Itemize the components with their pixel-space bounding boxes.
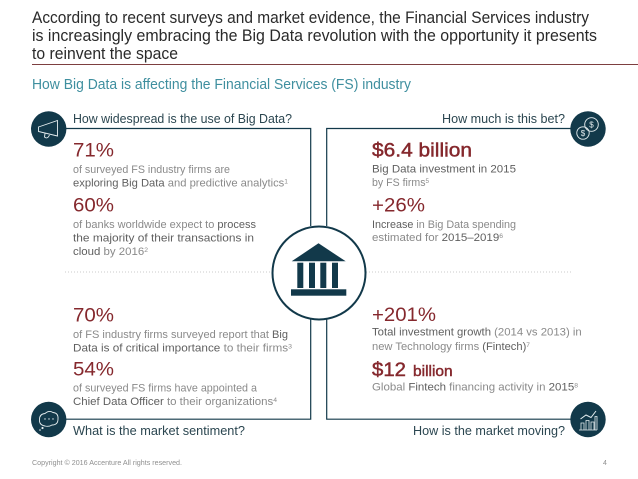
- panel: how widespread: How widespread is the use of Big Data?: [73, 111, 292, 126]
- stat: +26%: estimated for 2015–2019: [372, 232, 497, 244]
- panel: how much: [372, 111, 565, 244]
- stat: +26%: [372, 195, 516, 244]
- stat: 60%: [73, 195, 256, 258]
- stat: $12 billion: Global Fintech financing activity in 2015: [372, 382, 573, 394]
- title: to reinvent the space: [32, 44, 178, 63]
- stat: +26%: Increase in Big Data spending: [372, 219, 516, 231]
- quadrant frame: [66, 128, 572, 419]
- stat: $12 billion: $12: [372, 359, 406, 381]
- stat: $12 billion: 8: [574, 383, 578, 390]
- stat: 70%: 3: [288, 344, 292, 351]
- footer copyright: Copyright © 2016 Accenture All rights reserved.: [32, 459, 182, 467]
- stat: 60%: 60%: [73, 195, 114, 217]
- icon: coins: $: [589, 120, 594, 130]
- stat: 71%: 1: [284, 179, 288, 186]
- icon: thought cloud: [31, 402, 66, 437]
- stat: 60%: 2: [144, 247, 148, 254]
- stat: +26%: +26%: [372, 195, 425, 217]
- stat: $6.4 billion: Big Data investment in 2015: [372, 164, 516, 176]
- stat: +26%: 6: [499, 233, 503, 240]
- stat: 60%: of banks worldwide expect to process: [73, 219, 256, 231]
- stat: 71%: [73, 140, 288, 190]
- stat: 71%: of surveyed FS industry firms are: [73, 164, 230, 176]
- panel: market moving: How is the market moving?: [413, 423, 565, 438]
- icon: rising chart: [570, 402, 606, 437]
- stat: 60%: the majority of their transactions in: [73, 233, 254, 245]
- stat: $12 billion: [372, 359, 578, 394]
- stat: 71%: exploring Big Data and predictive analytics: [73, 178, 282, 190]
- stat: 54%: 54%: [73, 359, 114, 381]
- subtitle: How Big Data is affecting the Financial Services (FS) industry: [32, 77, 412, 93]
- title: According to recent surveys and market evidence, the Financial Services industry: [32, 8, 589, 27]
- title: [32, 8, 597, 63]
- stat: 71%: 71%: [73, 140, 114, 162]
- panel: how widespread: [73, 111, 292, 258]
- stat: $6.4 billion: 5: [426, 178, 429, 185]
- panel: market moving: [372, 304, 582, 438]
- stat: +201%: Total investment growth (2014 vs 2013) in: [372, 327, 582, 339]
- stat: 70%: [73, 305, 292, 355]
- stat: $6.4 billion: by FS firms: [372, 177, 428, 189]
- page number: 4: [603, 460, 607, 467]
- panel: market sentiment: [73, 305, 292, 438]
- stat: 54%: of surveyed FS firms have appointed a: [73, 383, 258, 395]
- title: is increasingly embracing the Big Data revolution with the opportunity it presents: [32, 26, 597, 45]
- icon: coins: [570, 111, 606, 147]
- stat: 70%: of FS industry firms surveyed report that Big: [73, 329, 288, 341]
- stat: 60%: cloud by 2016: [73, 246, 143, 258]
- stat: 70%: 70%: [73, 305, 114, 327]
- stat: +201%: +201%: [372, 304, 436, 326]
- central bank icon: [272, 226, 366, 320]
- stat: $6.4 billion: [372, 140, 516, 189]
- stat: 54%: Chief Data Officer to their organizations: [73, 396, 269, 408]
- panel: how much: How much is this bet?: [442, 111, 565, 126]
- stat: +201%: new Technology firms (Fintech): [372, 341, 526, 353]
- stat: 70%: Data is of critical importance to their firms: [73, 343, 284, 355]
- stat: $6.4 billion: $6.4 billion: [372, 140, 472, 162]
- panel: market sentiment: What is the market sentiment?: [73, 423, 245, 438]
- stat: 54%: [73, 359, 277, 408]
- stat: 54%: 4: [273, 397, 277, 404]
- stat: $12 billion: billion: [413, 364, 453, 380]
- icon: coins: $: [581, 129, 586, 138]
- stat: +201%: [372, 304, 582, 353]
- icon: megaphone: [31, 111, 66, 147]
- stat: +201%: 7: [526, 342, 530, 349]
